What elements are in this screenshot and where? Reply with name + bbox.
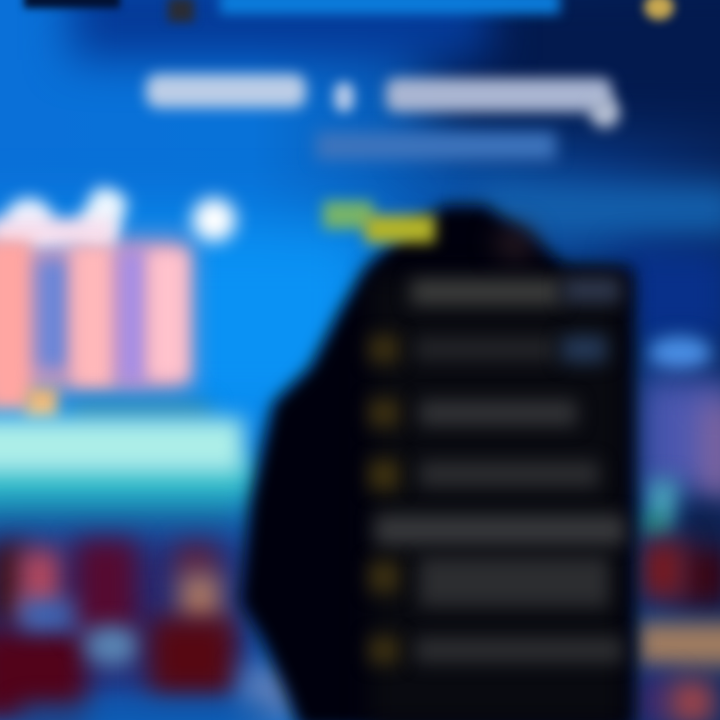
row 4 text [419, 461, 599, 487]
maroon figure [680, 546, 720, 606]
mauve patch [704, 400, 720, 500]
panel body tone [370, 275, 625, 720]
heading yellow part [365, 215, 435, 243]
building backing [0, 240, 190, 390]
top bar gold badge [644, 0, 674, 20]
red lower patch [670, 680, 714, 720]
panel silhouette [230, 192, 646, 720]
top bar [18, 0, 681, 29]
blue collar [20, 600, 96, 630]
crowd backdrop [0, 530, 255, 700]
title text left word [146, 74, 306, 108]
roof left peak [6, 198, 52, 238]
person right body [150, 618, 234, 694]
title text plus sign [334, 82, 354, 112]
background: dark upper right [430, 0, 720, 140]
row 2 tail [561, 335, 607, 363]
row 4 bullet [369, 460, 399, 490]
roof right peak [74, 182, 132, 248]
row 6 [361, 553, 616, 613]
row 2 text [415, 337, 555, 361]
green accent [640, 516, 668, 532]
row 7 bullet [369, 636, 399, 664]
background: deep blue upper band [70, 0, 490, 60]
row 1 [404, 270, 627, 314]
title text right word [386, 78, 612, 112]
list heading: green to yellow [312, 192, 446, 254]
person right face [180, 574, 220, 624]
teal figure [648, 480, 678, 530]
violet column [118, 250, 148, 384]
person left body [0, 630, 86, 720]
heading green part [323, 201, 373, 229]
tan band [636, 622, 720, 666]
subtitle [316, 132, 556, 160]
shadow strip above water [70, 402, 210, 422]
row 6 text [419, 557, 609, 607]
row 1 text [411, 279, 561, 305]
blue window [36, 258, 70, 370]
illustration: crowd [0, 498, 298, 720]
water middle band [0, 458, 255, 502]
person middle [76, 540, 136, 634]
panel head warm edge [495, 225, 535, 261]
row 2 [361, 324, 617, 374]
row 1 tail [563, 277, 621, 303]
background: sky glow [0, 220, 380, 430]
blue cloud [648, 336, 712, 370]
roof band [0, 218, 115, 248]
panel: dark list [230, 192, 648, 720]
right side scene [630, 325, 720, 720]
row 3 [360, 391, 583, 435]
person left dark head [0, 544, 26, 620]
row 7 text [415, 637, 623, 663]
illustration: building and shapes [0, 174, 250, 425]
pink column center [72, 246, 114, 386]
red figure [640, 540, 686, 600]
purple patch [642, 380, 720, 490]
pink column left [0, 240, 32, 410]
pink column right [148, 250, 188, 380]
water light band [0, 418, 244, 474]
row 6 bullet [369, 561, 399, 593]
bottom blue strip [20, 706, 270, 720]
top bar icon [168, 0, 194, 22]
row 2 bullet [369, 335, 399, 363]
title text descender [590, 98, 620, 128]
person middle collar [84, 626, 140, 666]
person left face [20, 550, 60, 620]
top bar bright strip [220, 0, 560, 14]
illustration: teal water [0, 385, 261, 532]
row 7 [361, 628, 628, 672]
purple lower band [634, 676, 674, 720]
row 3 text [419, 400, 577, 426]
lower right blue patch [242, 666, 296, 720]
moon [192, 198, 236, 242]
gold lantern [26, 388, 58, 418]
row 3 bullet [369, 399, 399, 427]
water lower band [0, 486, 245, 530]
top bar dark tab [24, 0, 120, 8]
dark navy figure [680, 506, 720, 546]
row 4 [360, 452, 604, 498]
title [136, 63, 630, 138]
row 5 [375, 515, 625, 545]
background: right navy panel [620, 250, 720, 340]
person right head [176, 544, 216, 578]
background: right blue band [480, 185, 720, 235]
